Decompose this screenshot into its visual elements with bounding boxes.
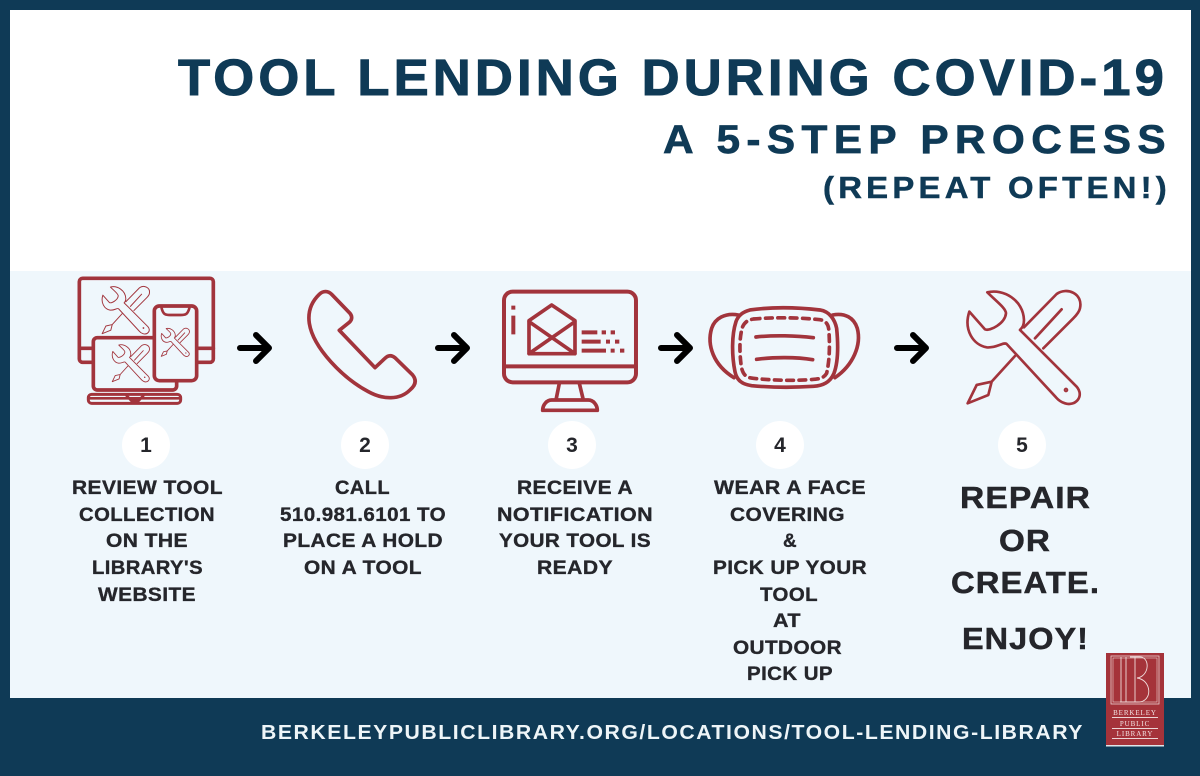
- number 5: 5: [1016, 434, 1028, 457]
- step 3 text: YOUR TOOL IS: [499, 530, 651, 552]
- step 5: [951, 421, 1100, 656]
- subtitle: A 5-STEP PROCESS: [663, 118, 1172, 162]
- step 4 text: AT: [773, 610, 801, 632]
- step 2 text: ON A TOOL: [304, 557, 422, 579]
- icon: computer with envelope: [504, 292, 636, 410]
- step 5 text: OR: [999, 523, 1051, 558]
- step 1 text: LIBRARY'S: [92, 557, 203, 579]
- step 1 text: REVIEW TOOL: [72, 477, 223, 499]
- step 3 text: READY: [537, 557, 613, 579]
- number 3: [548, 421, 596, 469]
- icon: devices with tools: [79, 278, 213, 403]
- step 5 text: [951, 480, 1100, 656]
- step 1 text: COLLECTION: [79, 504, 215, 526]
- step 5 text: ENJOY!: [962, 621, 1089, 656]
- number 5: [998, 421, 1046, 469]
- arrow 4: [897, 335, 926, 361]
- number 2: [341, 421, 389, 469]
- step 1 text: WEBSITE: [98, 584, 196, 606]
- step 3 text: NOTIFICATION: [497, 504, 653, 526]
- icon: telephone: [309, 292, 415, 398]
- step 1: [72, 421, 223, 606]
- step 4 text: OUTDOOR: [733, 637, 842, 659]
- step 4 text: &: [783, 530, 797, 552]
- white header panel: [10, 10, 1191, 272]
- logo: Berkeley Public Library: BERKELEY: [1113, 709, 1157, 717]
- number 4: [756, 421, 804, 469]
- step 3: [497, 421, 653, 579]
- step 1 text: ON THE: [106, 530, 188, 552]
- step 1 text: [72, 477, 223, 606]
- arrow 1: [240, 335, 269, 361]
- step 4 text: TOOL: [760, 584, 818, 606]
- step 5 text: CREATE.: [951, 565, 1100, 600]
- step 4 text: PICK UP: [747, 663, 833, 685]
- arrow 2: [438, 335, 467, 361]
- step 4 text: PICK UP YOUR: [713, 557, 867, 579]
- tagline: (REPEAT OFTEN!): [823, 170, 1171, 205]
- step 3 text: [497, 477, 653, 579]
- light blue steps panel: [10, 271, 1191, 698]
- number 4: 4: [774, 434, 786, 457]
- step 5 text: REPAIR: [960, 480, 1091, 515]
- step 4 text: [713, 477, 867, 685]
- logo: Berkeley Public Library: [1106, 653, 1164, 746]
- step 3 text: RECEIVE A: [517, 477, 633, 499]
- step 4: [713, 421, 867, 685]
- number 1: [122, 421, 170, 469]
- step 4 text: WEAR A FACE: [714, 477, 866, 499]
- title: TOOL LENDING DURING COVID-19: [178, 49, 1168, 106]
- number 3: 3: [566, 434, 578, 457]
- step 2 text: 510.981.6101 TO: [280, 504, 446, 526]
- number 1: 1: [140, 434, 152, 457]
- step 2 text: PLACE A HOLD: [283, 530, 443, 552]
- step 2 text: [280, 477, 446, 579]
- arrow 3: [661, 335, 690, 361]
- icon: wrench and screwdriver: [968, 291, 1080, 404]
- step 2 text: CALL: [335, 477, 390, 499]
- logo: Berkeley Public Library: LIBRARY: [1117, 730, 1153, 738]
- step 4 text: COVERING: [730, 504, 845, 526]
- number 2: 2: [359, 434, 371, 457]
- step 2: [280, 421, 446, 579]
- footer url: BERKELEYPUBLICLIBRARY.ORG/LOCATIONS/TOOL-LENDING-LIBRARY: [261, 721, 1084, 744]
- icon: face mask: [710, 308, 858, 387]
- logo: Berkeley Public Library: PUBLIC: [1120, 720, 1150, 728]
